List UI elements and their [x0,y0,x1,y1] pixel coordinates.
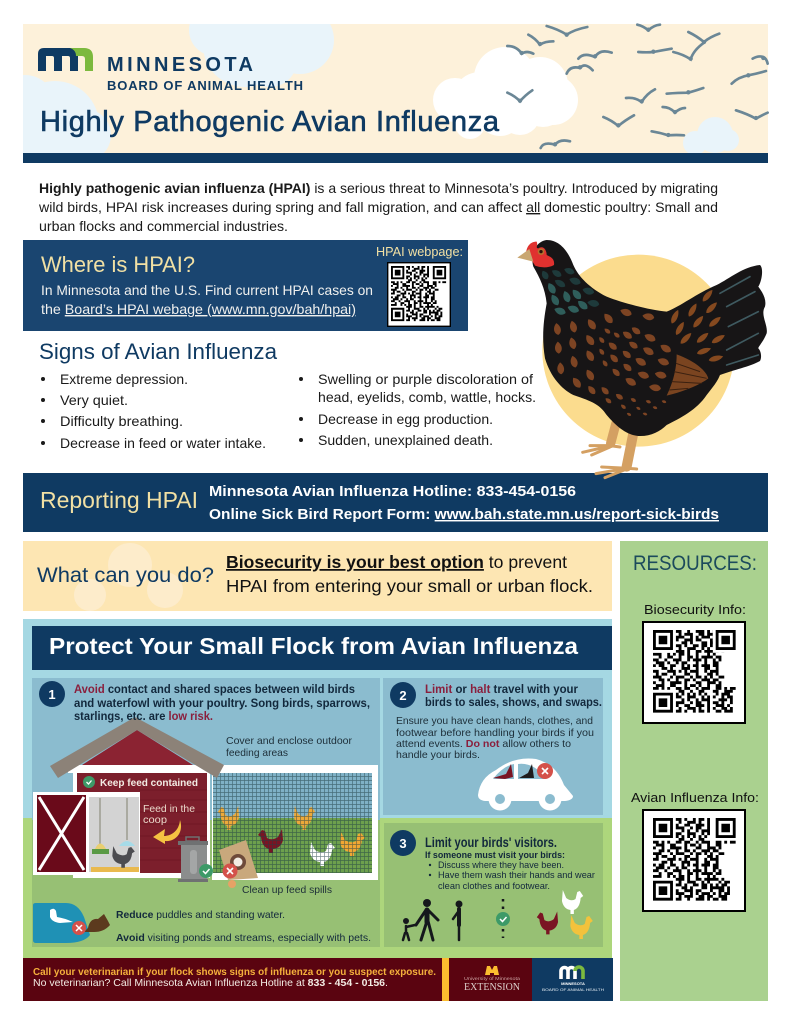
flock of birds [507,25,768,148]
coop [33,717,224,878]
panel: where is HPAI: Where is HPAI? [41,252,195,277]
panel: where is HPAI: HPAI webpage: [376,244,463,259]
arrow: feed in coop [153,820,181,844]
panel: resources [620,541,768,1001]
poster heading: Protect Your Small Flock from Avian Influenza [49,633,578,659]
step 2 badge [390,682,416,708]
panel: what can you do: What can you do? [37,564,214,587]
header rule [23,153,768,163]
eye [538,248,544,255]
step 1 text [74,682,370,723]
tail streaks [720,277,758,365]
organisation name: BOARD OF ANIMAL HEALTH [107,78,303,93]
caption: clean up spills: Clean up feed spills [242,884,332,896]
intro text: Highly pathogenic avian influenza (HPAI) is a serious threat to Minnesota’s poultry. Introduced by migrating [39,180,718,196]
step 2 panel [383,678,603,815]
step 3 birds [537,890,593,939]
list: signs column 1: Decrease in feed or water intake. [60,435,266,451]
step 2 body [396,715,594,761]
step 3 heading: Limit your birds' visitors. [425,835,557,850]
footer band [23,958,613,1001]
step 3 text: Have them wash their hands and wear [438,870,595,881]
caption: cover feeding areas [226,735,352,759]
step 1 text: starlings, etc. are low risk. [74,709,213,723]
step 2 body: handle your birds. [396,749,480,761]
University of Minnesota Extension logo [464,966,521,993]
caption: cover feeding areas: feeding areas [226,747,288,759]
intro text [38,180,718,234]
list: signs column 2 [299,371,536,448]
footer call to action: Call your veterinarian if your flock shows signs of influenza or you suspect exposure. [33,966,436,978]
intro text: wild birds, HPAI risk increases during spring and fall migration, and can affect all domestic poultry: Small and [38,199,718,215]
puddle tips: Avoid visiting ponds and streams, especially with pets. [116,932,371,944]
footer call to action: No veterinarian? Call Minnesota Avian Influenza Hotline at 833 - 454 - 0156. [33,977,388,989]
Board of Animal Health logo [542,967,604,992]
puddle tips: Reduce puddles and standing water. [116,909,285,921]
panel: reporting HPAI [23,473,768,532]
step 2 heading: Limit or halt travel with your [425,682,578,696]
step 3 badge: 3 [399,836,407,851]
list: signs column 1 [41,371,266,451]
roof [50,717,224,778]
step 2 body: attend events. Do not allow others to [396,738,571,750]
comb and wattle [526,242,554,267]
keep feed contained label: Keep feed contained [100,778,198,789]
wing [667,354,708,396]
list: signs column 1: Extreme depression. [60,371,188,387]
step 2 body: footwear before handling your birds if you [396,727,594,739]
hen legs [583,423,637,478]
neck feathers [540,266,600,316]
page header banner [23,23,769,153]
puddle with duck and dog [33,903,110,943]
step 3 text: Discuss where they have been. [438,860,564,871]
beak [517,249,533,262]
panel: resources: Avian Influenza Info: [631,790,759,805]
panel: reporting HPAI: Minnesota Avian Influenza Hotline: 833-454-0156 [209,484,576,500]
panel: what can you do [23,541,612,611]
QR code: biosecurity [643,622,745,723]
poster heading [32,626,612,670]
hen illustration [517,240,767,478]
feed bag [219,840,258,888]
step 2 body: Ensure you have clean hands, clothes, and [396,715,593,727]
panel: reporting HPAI: Reporting HPAI [40,487,198,513]
heading: signs of avian influenza: Signs of Avian Influenza [39,339,277,364]
QR code: HPAI webpage [387,262,451,327]
panel: what can you do: HPAI from entering your small or urban flock. [226,576,593,596]
background clouds [23,24,739,153]
step 1 badge: 1 [48,687,56,702]
run birds [218,806,365,866]
panel: what can you do: Biosecurity is your best option to prevent [226,552,567,572]
panel: resources: RESOURCES: [633,552,757,575]
list: signs column 1: Very quiet. [60,392,128,408]
step 3 panel [384,823,603,947]
QR code: avian influenza [643,810,745,911]
title: Highly Pathogenic Avian Influenza [40,106,500,138]
visitors silhouettes [403,899,462,940]
Board of Animal Health logo: BOARD OF ANIMAL HEALTH [542,987,604,992]
panel: where is HPAI: In Minnesota and the U.S. Find current HPAI cases on [41,282,373,298]
fenced run [212,765,378,880]
puddle tips [116,909,371,944]
hen body [532,240,767,436]
panel: where is HPAI [23,240,468,331]
sun circle [542,255,734,447]
caption: feed in the coop [143,803,195,826]
car with birds [478,758,573,810]
feed bin [178,837,213,882]
panel: resources: Biosecurity Info: [644,602,746,617]
caption: feed in the coop: coop [143,814,167,826]
list: signs column 2: Sudden, unexplained death. [318,432,493,448]
step 2 heading [425,682,602,709]
list: signs column 1: Difficulty breathing. [60,413,183,429]
step 1 badge [39,681,65,707]
caption: cover feeding areas: Cover and enclose outdoor [226,735,352,747]
caption: feed in the coop: Feed in the [143,803,195,815]
University of Minnesota Extension logo: University of Minnesota [464,976,521,981]
list: signs column 2: Decrease in egg production. [318,411,493,427]
organisation name [107,54,303,93]
organisation name: MINNESOTA [107,54,253,76]
step 3 text: clean clothes and footwear. [438,881,550,892]
tail feathers [669,288,726,363]
step 3 text [425,850,595,892]
step 1 text: and waterfowl with your poultry. Song birds, sparrows, [74,696,370,710]
Board of Animal Health logo: MINNESOTA [561,981,585,986]
Minnesota logo mark [38,48,93,71]
step 2 heading: birds to sales, shows, and swaps. [425,695,602,709]
dashed divider with check [496,899,510,938]
step 2 badge: 2 [399,688,407,703]
step 3 badge [390,830,416,856]
list: signs column 2: Swelling or purple discoloration of [318,371,533,387]
poster: protect your small flock [23,619,613,1001]
University of Minnesota Extension logo: EXTENSION [464,982,520,993]
step 1 panel [32,678,380,947]
panel: where is HPAI: the Board’s HPAI webage (www.mn.gov/bah/hpai) [41,301,356,317]
body feathers [553,307,673,417]
panel: reporting HPAI: Online Sick Bird Report Form: www.bah.state.mn.us/report-sick-birds [209,507,719,523]
footer call to action [33,966,436,989]
step 3 text: If someone must visit your birds: [425,850,565,861]
list: signs column 2: head, eyelids, comb, wattle, hocks. [318,389,536,405]
step 1 text: Avoid contact and shared spaces between wild birds [74,682,355,696]
intro text: urban flocks and commercial industries. [39,218,288,234]
coop door [33,792,140,875]
